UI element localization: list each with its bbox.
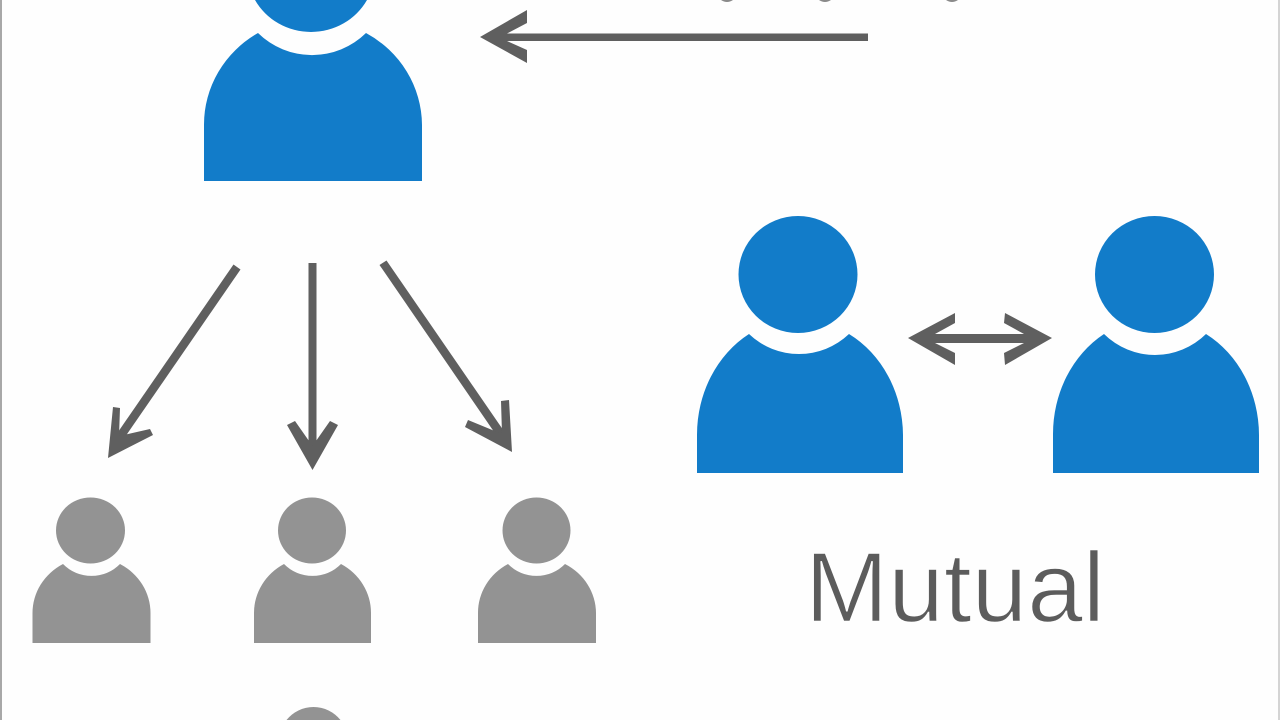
arrow: down left	[108, 264, 240, 458]
label: Mutual: Mutual	[805, 532, 1105, 642]
arrow: down right	[380, 260, 512, 452]
arrow: incoming from right to manager	[480, 10, 868, 63]
arrow: two-way mutual	[908, 313, 1052, 365]
icon: subordinate person 1 (gray)	[32, 498, 150, 643]
icon: subordinate person 3 (gray)	[478, 498, 596, 643]
clipped heading descenders	[721, 0, 958, 2]
icon: subordinate person 2 (gray)	[254, 498, 371, 643]
icon: partial person head (gray)	[286, 707, 340, 720]
icon: mutual person left (blue)	[697, 216, 903, 473]
icon: manager person (blue)	[204, 0, 422, 181]
icon: mutual person right (blue)	[1053, 216, 1259, 473]
arrow: down centre	[287, 263, 338, 470]
